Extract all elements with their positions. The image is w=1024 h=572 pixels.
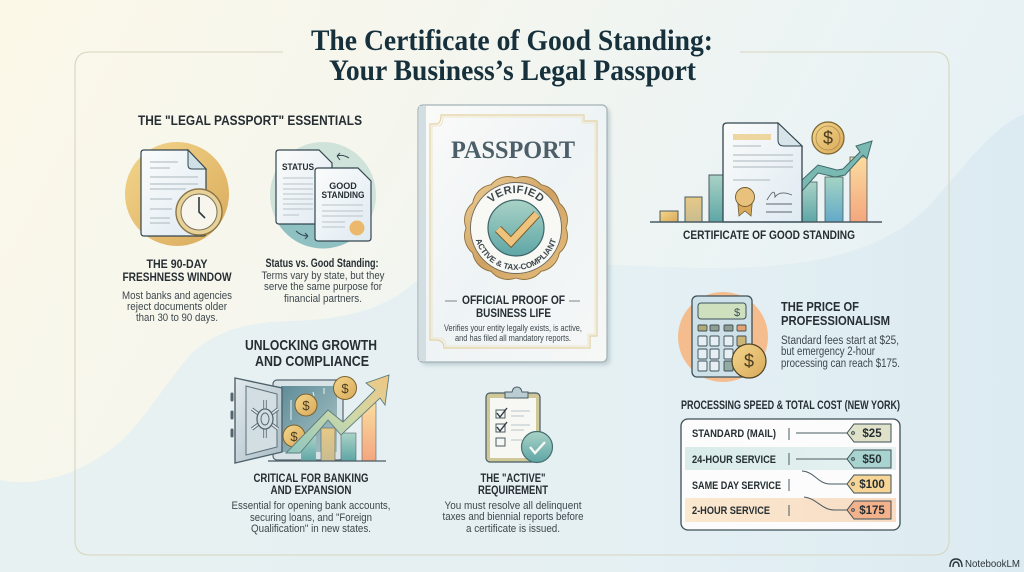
title: The Certificate of Good Standing: bbox=[311, 24, 713, 57]
row: standard mail: STANDARD (MAIL) bbox=[692, 428, 776, 440]
text: active requirement: REQUIREMENT bbox=[478, 483, 549, 497]
panel: processing price table bbox=[681, 419, 900, 530]
row: same day service bbox=[692, 475, 891, 493]
text: price of professionalism: but emergency 2-hour bbox=[781, 346, 875, 358]
icon: safe with growth arrow: $ bbox=[341, 381, 349, 396]
passport caption: Verifies your entity legally exists, is active, bbox=[444, 323, 582, 334]
text: status vs good standing bbox=[262, 258, 385, 305]
passport word: PASSPORT bbox=[451, 137, 575, 164]
text: critical for banking: AND EXPANSION bbox=[270, 483, 352, 497]
text: price of professionalism: processing can reach $175. bbox=[781, 358, 900, 370]
text: 90-day freshness window: Most banks and agencies bbox=[122, 290, 232, 302]
row: standard mail bbox=[692, 424, 891, 442]
text: critical for banking bbox=[232, 471, 390, 535]
text: status vs good standing: Status vs. Good Standing: bbox=[266, 258, 378, 270]
label: certificate of good standing: CERTIFICATE OF GOOD STANDING bbox=[683, 228, 855, 242]
text: critical for banking: Qualification" in new states. bbox=[251, 523, 371, 535]
icon: status vs good standing documents: GOOD bbox=[329, 181, 357, 191]
text: active requirement bbox=[442, 471, 584, 535]
icon: status vs good standing documents bbox=[270, 142, 376, 249]
passport caption: and has filed all mandatory reports. bbox=[455, 333, 571, 344]
seal: verified: ACTIVE & TAX-COMPLIANT bbox=[476, 238, 556, 270]
row: standard mail: $25 bbox=[862, 428, 882, 440]
text: 90-day freshness window: FRESHNESS WINDOW bbox=[122, 270, 232, 284]
row: 24-hour service: $50 bbox=[862, 454, 882, 466]
text: critical for banking: CRITICAL FOR BANKING bbox=[254, 471, 368, 485]
row: 2-hour service: $175 bbox=[859, 505, 885, 517]
text: active requirement: THE "ACTIVE" bbox=[480, 471, 546, 485]
seal: verified bbox=[464, 176, 568, 280]
heading: legal passport essentials: THE "LEGAL PASSPORT" ESSENTIALS bbox=[138, 113, 362, 128]
text: critical for banking: securing loans, and "Foreign bbox=[250, 512, 372, 524]
text: status vs good standing: Terms vary by state, but they bbox=[262, 270, 385, 282]
text: 90-day freshness window: THE 90-DAY bbox=[146, 257, 208, 271]
icon: certificate with growth chart bbox=[650, 122, 882, 222]
icon: certificate with growth chart: $ bbox=[823, 128, 833, 148]
text: 90-day freshness window bbox=[122, 257, 232, 324]
panel: passport bbox=[417, 104, 612, 367]
text: price of professionalism: Standard fees start at $25, bbox=[781, 335, 899, 347]
heading: unlocking growth bbox=[245, 337, 377, 370]
seal: verified: VERIFIED bbox=[486, 185, 544, 202]
icon: status vs good standing documents: STATUS bbox=[282, 162, 314, 172]
text: price of professionalism: THE PRICE OF bbox=[781, 299, 859, 314]
icon: safe with growth arrow bbox=[232, 375, 389, 463]
text: price of professionalism: PROFESSIONALISM bbox=[781, 313, 890, 328]
chart heading: processing speed: PROCESSING SPEED & TOTAL COST (NEW YORK) bbox=[681, 398, 900, 412]
icon: calculator bbox=[678, 292, 768, 382]
passport caption: OFFICIAL PROOF OF bbox=[462, 293, 565, 307]
title: Your Business’s Legal Passport bbox=[329, 54, 696, 87]
text: active requirement: You must resolve all delinquent bbox=[444, 500, 582, 512]
passport caption bbox=[444, 293, 582, 344]
icon: clipboard with check bbox=[486, 387, 552, 462]
icon: calculator: $ bbox=[744, 351, 754, 371]
icon: safe with growth arrow: $ bbox=[302, 398, 310, 413]
text: active requirement: a certificate is issued. bbox=[466, 523, 560, 535]
text: active requirement: taxes and biennial reports before bbox=[442, 511, 584, 523]
heading: unlocking growth: AND COMPLIANCE bbox=[255, 353, 369, 370]
row: 24-hour service: 24-HOUR SERVICE bbox=[692, 454, 776, 466]
logo: NotebookLM: NotebookLM bbox=[965, 558, 1020, 570]
heading: unlocking growth: UNLOCKING GROWTH bbox=[245, 337, 377, 354]
icon: safe with growth arrow: $ bbox=[290, 429, 298, 444]
row: 24-hour service bbox=[692, 450, 891, 468]
row: same day service: SAME DAY SERVICE bbox=[692, 480, 781, 492]
icon: document with clock bbox=[125, 142, 229, 246]
text: critical for banking: Essential for opening bank accounts, bbox=[232, 500, 390, 512]
row: same day service: $100 bbox=[859, 479, 885, 491]
row: 2-hour service bbox=[692, 501, 891, 519]
passport caption: BUSINESS LIFE bbox=[476, 306, 551, 320]
title bbox=[311, 24, 713, 87]
icon: calculator: $ bbox=[734, 307, 740, 319]
row: 2-hour service: 2-HOUR SERVICE bbox=[692, 505, 770, 517]
content frame bbox=[75, 52, 949, 555]
text: status vs good standing: financial partners. bbox=[284, 293, 362, 305]
text: 90-day freshness window: than 30 to 90 days. bbox=[136, 312, 218, 324]
text: 90-day freshness window: reject documents older bbox=[127, 301, 227, 313]
text: status vs good standing: serve the same purpose for bbox=[264, 281, 382, 293]
icon: status vs good standing documents: STANDING bbox=[322, 190, 364, 200]
text: price of professionalism bbox=[781, 299, 900, 370]
